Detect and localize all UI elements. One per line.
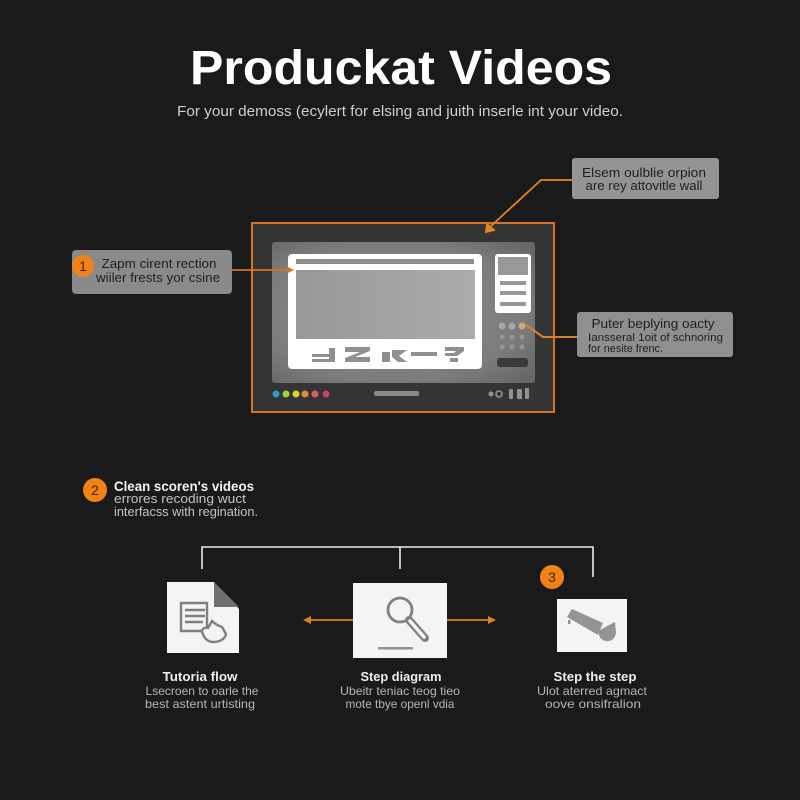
callout: left: Zapm cirent rection bbox=[102, 256, 216, 271]
icon card: tutorial document bbox=[167, 582, 239, 653]
text block: clean screen videos bbox=[114, 479, 258, 519]
label: step the step: oove onsifralion bbox=[545, 697, 641, 711]
label: step diagram bbox=[340, 670, 460, 711]
main video window bbox=[288, 254, 482, 369]
badge 1: 1 bbox=[79, 258, 87, 274]
orange highlight frame bbox=[252, 223, 554, 412]
callout: left: wiiler frests yor csine bbox=[95, 270, 220, 285]
connector bracket bbox=[202, 547, 593, 577]
callout: right: Puter beplying oacty bbox=[592, 316, 715, 331]
label: step diagram: Ubeitr teniac teog tieo bbox=[340, 684, 460, 698]
progress bar bbox=[374, 391, 419, 396]
badge 3: 3 bbox=[548, 569, 556, 585]
subtitle: For your demoss (ecylert for elsing and juith inserle int your video. bbox=[177, 103, 623, 120]
arrow: right of step diagram bbox=[447, 616, 496, 624]
arrow: left of step diagram bbox=[303, 616, 353, 624]
label: tutorial flow bbox=[145, 670, 259, 711]
text block: clean screen videos: interfacss with regination. bbox=[114, 504, 258, 519]
player controls bbox=[488, 388, 529, 399]
text block: clean screen videos: errores recoding wuct bbox=[114, 491, 246, 506]
label: tutorial flow: best astent urtisting bbox=[145, 697, 255, 711]
title: Produckat Videos bbox=[190, 42, 612, 95]
badge 3 bbox=[540, 565, 564, 589]
arrow: left callout to screen bbox=[232, 266, 294, 274]
text block: clean screen videos: Clean scoren's videos bbox=[114, 479, 254, 494]
label: tutorial flow: Lsecroen to oarle the bbox=[146, 684, 259, 698]
label: step the step: Step the step bbox=[554, 670, 637, 684]
callout: right bbox=[577, 312, 733, 357]
arrow: top callout to frame bbox=[486, 180, 573, 232]
callout: right: for nesite frenc. bbox=[588, 343, 663, 355]
screen body bbox=[272, 242, 535, 383]
garbled caption glyphs bbox=[312, 347, 464, 362]
colour dots bbox=[272, 390, 330, 398]
callout: right: Iansseral 1oit of schnoring bbox=[588, 332, 723, 344]
callout: top right bbox=[572, 158, 719, 199]
side card bbox=[495, 254, 531, 313]
label: step the step bbox=[537, 670, 648, 711]
label: step diagram: mote tbye openl vdia bbox=[346, 697, 455, 711]
label: step diagram: Step diagram bbox=[360, 670, 442, 684]
keypad buttons bbox=[497, 322, 528, 367]
label: tutorial flow: Tutoria flow bbox=[162, 670, 238, 684]
label: step the step: Ulot aterred agmact bbox=[537, 684, 648, 698]
badge 1 bbox=[72, 255, 94, 277]
callout: top right: are rey attovitle wall bbox=[586, 178, 703, 193]
badge 2: 2 bbox=[91, 482, 99, 498]
callout: left bbox=[72, 250, 232, 294]
badge 2 bbox=[83, 478, 107, 502]
icon card: step diagram magnifier bbox=[353, 583, 447, 658]
panel: product screen mockup bbox=[252, 223, 554, 412]
arrow: right callout to keypad bbox=[526, 325, 577, 337]
icon card: step the step tool bbox=[557, 599, 627, 652]
callout: top right: Elsem oulblie orpion bbox=[582, 165, 706, 180]
